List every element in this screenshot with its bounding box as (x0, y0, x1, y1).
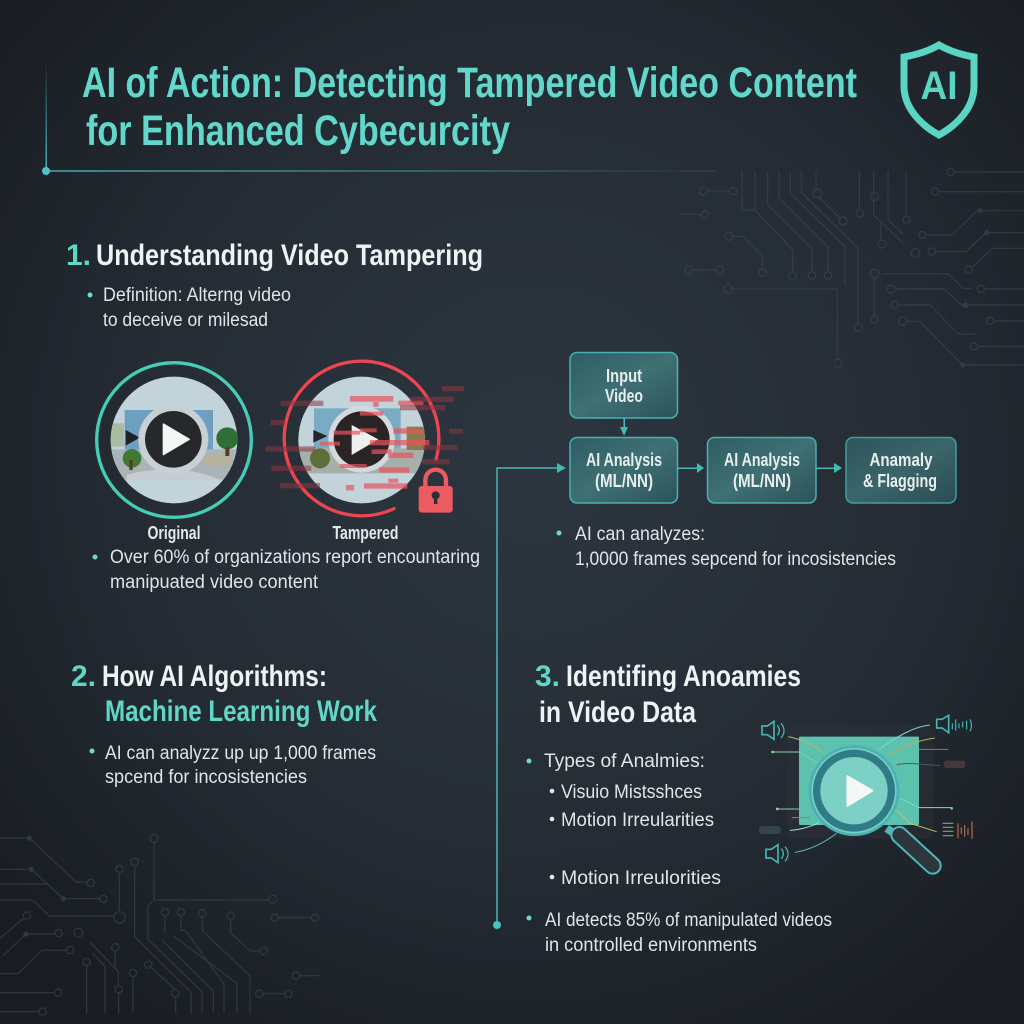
section 3 list: Motion Irreularities (561, 810, 714, 831)
flowchart caption: AI can analyzes: (575, 524, 705, 545)
box: input video (570, 352, 678, 418)
section 3 heading: in Video Data (539, 696, 696, 729)
icon: tampered video (265, 361, 464, 516)
icon: AI shield (904, 45, 974, 135)
box: anomaly and flagging: & Flagging (863, 471, 937, 491)
section 3 heading: 3. (535, 660, 560, 693)
box: input video: Video (605, 386, 643, 406)
section 3 list: AI detects 85% of manipulated videos (545, 910, 832, 931)
circuit pattern: bottom left (0, 834, 320, 1015)
box: AI analysis 1: AI Analysis (586, 450, 662, 470)
box: AI analysis 2: (ML/NN) (733, 471, 791, 491)
section 2 text: AI can analyzz up up 1,000 frames (105, 743, 376, 764)
box: AI analysis 1 (570, 438, 678, 503)
section 1 heading: Understanding Video Tampering (96, 239, 483, 272)
section 3 heading (535, 660, 801, 729)
labels: original and tampered: Original (148, 523, 200, 543)
section 1 definition: Definition: Alterng video (103, 285, 291, 306)
flowchart (570, 352, 956, 503)
box: AI analysis 2: AI Analysis (724, 450, 800, 470)
section 1 heading: 1. (66, 239, 91, 272)
box: anomaly and flagging (846, 438, 956, 503)
labels: original and tampered: Tampered (332, 523, 398, 543)
flow arrows (620, 418, 842, 473)
icon: AI shield: AI (920, 64, 958, 108)
section 2 heading (71, 660, 377, 728)
section 3 list: in controlled environments (545, 935, 757, 956)
section 2 text (90, 743, 376, 788)
section 2 heading: 2. (71, 660, 96, 693)
box: input video: Input (606, 366, 642, 386)
box: AI analysis 2 (708, 438, 816, 503)
section 1 definition: to deceive or milesad (103, 310, 268, 331)
section 3 list (526, 751, 832, 956)
section 1 statistic: manipuated video content (110, 572, 319, 593)
icon: original video (97, 363, 251, 517)
title bracket line (42, 60, 718, 175)
box: anomaly and flagging: Anamaly (870, 450, 932, 470)
section 3 list: Visuio Mistsshces (561, 782, 702, 803)
section 2 text: spcend for incosistencies (105, 767, 307, 788)
connector line from section 3 to flowchart (493, 463, 566, 929)
section 1 statistic: Over 60% of organizations report encountaring (110, 547, 480, 568)
section 3 list: Motion Irreulorities (561, 868, 721, 889)
title (82, 59, 857, 155)
section 3 list: Types of Analmies: (544, 751, 705, 772)
section 1 definition (88, 285, 291, 331)
labels: original and tampered (148, 523, 398, 543)
icon: red padlock (419, 470, 453, 513)
section 1 statistic (92, 547, 480, 593)
section 3 heading: Identifing Anoamies (566, 660, 801, 693)
box: AI analysis 1: (ML/NN) (595, 471, 653, 491)
section 2 heading: How AI Algorithms: (102, 660, 327, 693)
section 2 heading: Machine Learning Work (105, 695, 377, 728)
circuit pattern: top right (680, 168, 1024, 367)
flowchart caption: 1,0000 frames sepcend for incosistencies (575, 549, 896, 570)
icon: magnifier over video with audio signals (759, 715, 972, 866)
title: for Enhanced Cybecurcity (86, 107, 510, 155)
flowchart caption (556, 524, 896, 570)
